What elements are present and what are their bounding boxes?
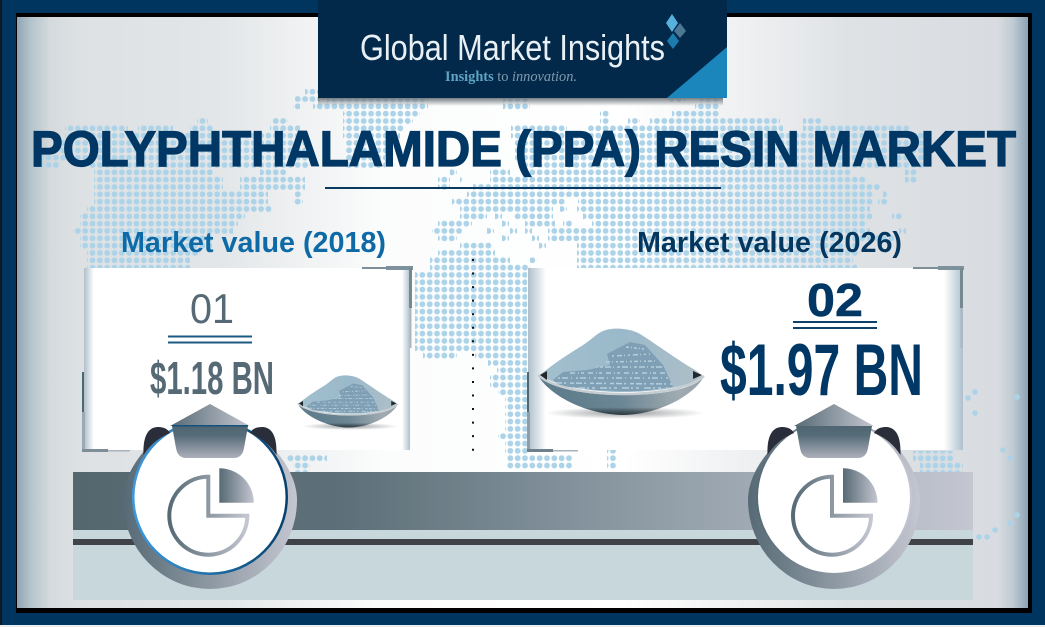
logo tagline: Insights to innovation. — [445, 69, 577, 85]
double rule — [793, 321, 877, 329]
number 01: 01 — [190, 285, 234, 332]
icon: pie chart — [793, 468, 878, 555]
logo name: Global Market Insights — [360, 27, 665, 68]
badge: right pie chart — [748, 404, 920, 589]
icon: pie chart — [169, 468, 254, 555]
icon: powder bowl small — [298, 375, 398, 430]
vertical dotted divider — [472, 259, 474, 452]
value 1.18 BN: $1.18 BN — [150, 352, 274, 404]
heading: market value 2026: Market value (2026) — [637, 227, 902, 259]
icon: powder bowl large — [538, 329, 705, 419]
badge: left pie chart — [123, 404, 297, 589]
panel: market value 2026 — [527, 266, 964, 452]
logo banner — [318, 0, 727, 106]
number 02: 02 — [807, 274, 863, 326]
logo corner triangle — [667, 47, 727, 98]
bottom band — [73, 472, 973, 600]
dotted world map — [33, 88, 1020, 540]
panel: market value 2018 — [82, 266, 413, 452]
heading: market value 2018: Market value (2018) — [121, 227, 386, 259]
title: POLYPHTHALAMIDE (PPA) RESIN MARKET — [31, 121, 1016, 177]
title underline — [325, 187, 721, 189]
logo diamonds — [666, 14, 686, 49]
value 1.97 BN: $1.97 BN — [720, 330, 923, 411]
double rule — [168, 336, 252, 344]
